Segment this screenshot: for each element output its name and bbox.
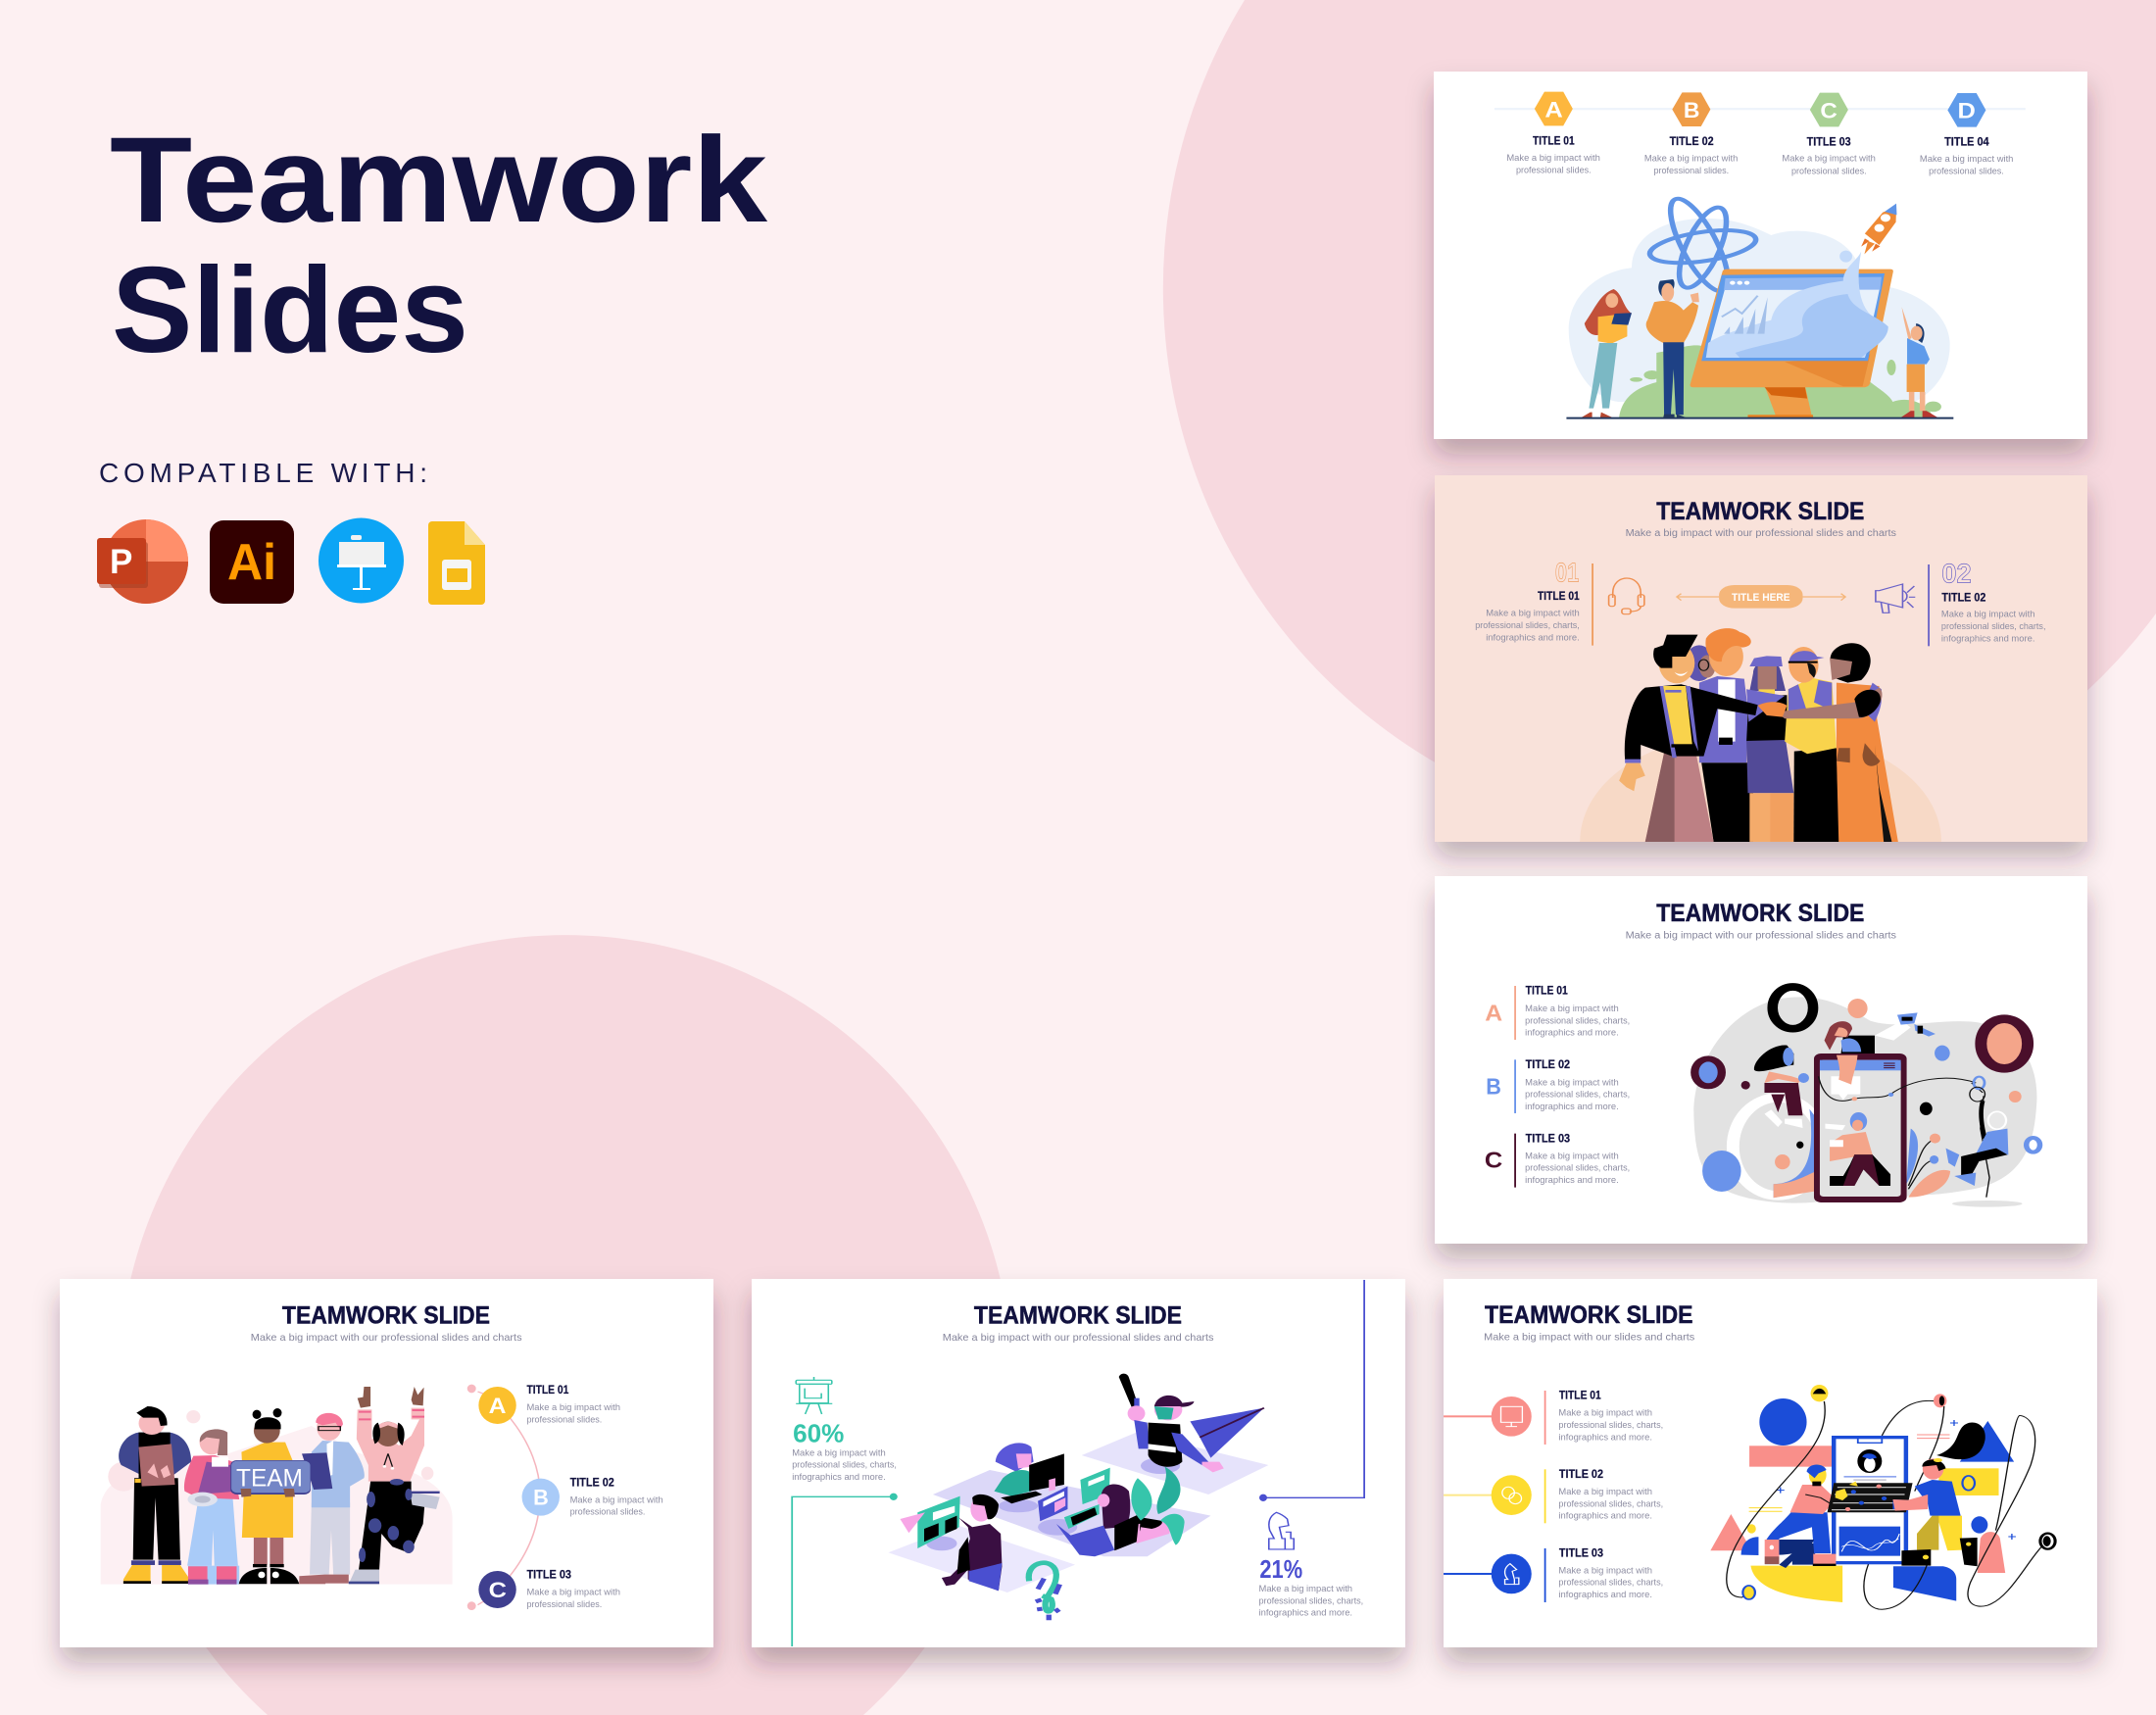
left text block: Make a big impact with (1486, 609, 1580, 618)
step A: professional slides. (1516, 166, 1592, 175)
left text block: TITLE 01 (1538, 589, 1580, 602)
step D: TITLE 04 (1944, 135, 1989, 148)
item B (1486, 1057, 1630, 1113)
item B: B (1486, 1074, 1501, 1100)
item C: C (1485, 1148, 1502, 1173)
step B (1644, 92, 1738, 175)
item C: professional slides. (526, 1599, 602, 1610)
item 01 with monitor icon: professional slides, charts, (1558, 1420, 1663, 1431)
panel: peach slide with people joining hands (1435, 475, 2087, 842)
item 01 with monitor icon (1444, 1390, 1663, 1445)
step C: Make a big impact with (1782, 154, 1876, 164)
item B (522, 1476, 663, 1517)
item 01 with monitor icon: infographics and more. (1558, 1433, 1652, 1443)
icon: Keynote (318, 517, 404, 604)
left text block: professional slides, charts, (1475, 621, 1580, 630)
heading (1626, 900, 1896, 941)
item 02 with chat icon: Make a big impact with (1558, 1487, 1652, 1497)
step D: Make a big impact with (1920, 155, 2013, 164)
illustration: group of people (1580, 628, 1941, 842)
heading (943, 1303, 1214, 1344)
item C (467, 1568, 620, 1610)
heading: TEAMWORK SLIDE (1485, 1302, 1692, 1329)
icon: PowerPoint (97, 519, 188, 604)
item B: professional slides, charts, (1525, 1090, 1630, 1100)
step B: TITLE 02 (1670, 134, 1714, 147)
item B: TITLE 02 (1526, 1057, 1570, 1070)
stat: 60%: infographics and more. (792, 1472, 886, 1483)
title: Teamwork (110, 113, 768, 248)
stat: 21%: professional slides, charts, (1259, 1596, 1363, 1606)
panel: bottom-right slide with icon list and phone (1444, 1279, 2097, 1647)
heading: Make a big impact with our professional slides and charts (1626, 527, 1896, 538)
center pill with arrows (1677, 585, 1845, 609)
item 01 with monitor icon: TITLE 01 (1559, 1390, 1601, 1401)
item 02 with chat icon (1444, 1468, 1663, 1523)
item A (1485, 984, 1630, 1040)
item 03 with chess icon: Make a big impact with (1558, 1566, 1652, 1576)
heading: Make a big impact with our professional slides and charts (251, 1332, 522, 1344)
background circle bottom left (119, 935, 1012, 1715)
right text block: 02 (1941, 558, 1972, 588)
center pill with arrows: TITLE HERE (1732, 591, 1790, 603)
item C: professional slides, charts, (1525, 1163, 1630, 1173)
title: Slides (112, 243, 468, 378)
item 02 with chat icon: professional slides, charts, (1558, 1499, 1663, 1509)
item B: B (533, 1485, 549, 1510)
heading (251, 1303, 522, 1344)
step C: TITLE 03 (1807, 135, 1851, 148)
item A: TITLE 01 (526, 1384, 569, 1396)
left text block: 01 (1555, 557, 1579, 587)
item 03 with chess icon: infographics and more. (1558, 1590, 1652, 1600)
item 03 with chess icon (1444, 1546, 1663, 1602)
stat: 60%: Make a big impact with (792, 1448, 886, 1458)
left text block (1475, 557, 1593, 646)
step A: A (1544, 97, 1563, 122)
icon: headset (1609, 578, 1644, 614)
right text block: Make a big impact with (1941, 610, 2034, 619)
stat: 21%: infographics and more. (1259, 1608, 1352, 1618)
step C: professional slides. (1791, 167, 1867, 176)
illustration: team around giant phone (1693, 987, 2040, 1207)
item A: TITLE 01 (1526, 984, 1568, 997)
item B: professional slides. (570, 1507, 645, 1517)
icon: Illustrator (210, 520, 294, 604)
heading (1484, 1302, 1694, 1343)
item A: Make a big impact with (526, 1402, 620, 1413)
right text block: infographics and more. (1941, 634, 2034, 644)
item B: infographics and more. (1525, 1102, 1619, 1111)
item 03 with chess icon: professional slides, charts, (1558, 1578, 1663, 1588)
icon: Illustrator: Ai (227, 534, 276, 591)
item 03 with chess icon: TITLE 03 (1559, 1546, 1603, 1559)
step B: Make a big impact with (1644, 154, 1738, 164)
stat: 60%: professional slides, charts, (792, 1460, 897, 1470)
heading: TEAMWORK SLIDE (974, 1303, 1182, 1330)
item A: professional slides, charts, (1525, 1016, 1630, 1026)
item B: TITLE 02 (570, 1476, 614, 1489)
item C: Make a big impact with (526, 1588, 620, 1597)
item A: infographics and more. (1525, 1028, 1619, 1038)
heading: Make a big impact with our professional slides and charts (943, 1332, 1214, 1344)
item A: Make a big impact with (1525, 1004, 1619, 1013)
step A: Make a big impact with (1506, 154, 1600, 163)
connector arc (477, 1392, 540, 1605)
step A (1506, 92, 1600, 175)
heading: TEAMWORK SLIDE (1656, 498, 1864, 525)
heading: TEAMWORK SLIDE (1656, 900, 1864, 927)
item A (467, 1384, 620, 1425)
item C (1485, 1132, 1630, 1188)
item C: infographics and more. (1525, 1175, 1619, 1185)
stat: 60%: 60% (793, 1419, 844, 1448)
icon: chess pieces (1269, 1512, 1294, 1549)
icon: megaphone (1876, 584, 1915, 612)
background circle top right (1163, 0, 2156, 838)
left text block: infographics and more. (1486, 633, 1580, 643)
stat: 60% (792, 1419, 897, 1483)
step D (1920, 93, 2013, 176)
right text block: professional slides, charts, (1941, 622, 2045, 631)
item 01 with monitor icon: Make a big impact with (1558, 1408, 1652, 1418)
step A: TITLE 01 (1533, 134, 1575, 147)
step D: D (1957, 99, 1976, 123)
item B: Make a big impact with (1525, 1078, 1619, 1088)
item A: A (1485, 1001, 1502, 1026)
illustration: isometric team at desks (888, 1374, 1268, 1620)
step B: B (1684, 98, 1699, 122)
item A: A (489, 1394, 507, 1418)
compatible with label: COMPATIBLE WITH: (99, 458, 427, 488)
icon: PowerPoint: P (110, 543, 132, 581)
step B: professional slides. (1654, 167, 1729, 175)
heading: Make a big impact with our professional slides and charts (1626, 929, 1896, 941)
item C: C (489, 1578, 507, 1602)
panel: bottom-left slide with team holding sign (60, 1279, 713, 1647)
right text block (1928, 558, 2045, 646)
panel: bottom-middle isometric slide with percentages (752, 1279, 1405, 1647)
panel: slide with A B C list and phone illustration (1435, 876, 2087, 1244)
step C (1782, 93, 1876, 176)
icon: presentation board (796, 1377, 832, 1414)
heading (1626, 498, 1896, 538)
item 02 with chat icon: infographics and more. (1558, 1511, 1652, 1521)
illustration: five people with TEAM sign: TEAM (236, 1465, 303, 1493)
step C: C (1820, 98, 1838, 122)
item C: Make a big impact with (1525, 1152, 1619, 1161)
connector: blue line (1259, 1280, 1364, 1501)
item A: professional slides. (526, 1415, 602, 1425)
illustration: five people with TEAM sign (101, 1387, 453, 1585)
item C: TITLE 03 (526, 1568, 571, 1581)
connector: teal line (792, 1494, 898, 1646)
right text block: TITLE 02 (1941, 591, 1986, 604)
item B: Make a big impact with (570, 1495, 663, 1505)
stat: 21%: Make a big impact with (1259, 1584, 1352, 1594)
icon: Google Slides (428, 521, 485, 605)
step D: professional slides. (1929, 167, 2004, 176)
stat: 21% (1259, 1554, 1363, 1618)
item C: TITLE 03 (1526, 1132, 1570, 1145)
heading: Make a big impact with our slides and charts (1484, 1331, 1694, 1343)
item 02 with chat icon: TITLE 02 (1559, 1468, 1603, 1481)
stat: 21%: 21% (1259, 1554, 1302, 1584)
panel: slide with four hexagon steps (1434, 72, 2087, 439)
hexagon timeline line (1494, 108, 2026, 110)
illustration: team launching rocket from monitor (1566, 194, 1953, 419)
title (110, 113, 768, 378)
heading: TEAMWORK SLIDE (282, 1303, 490, 1330)
illustration: two people tuning phone controls (1710, 1385, 2055, 1609)
